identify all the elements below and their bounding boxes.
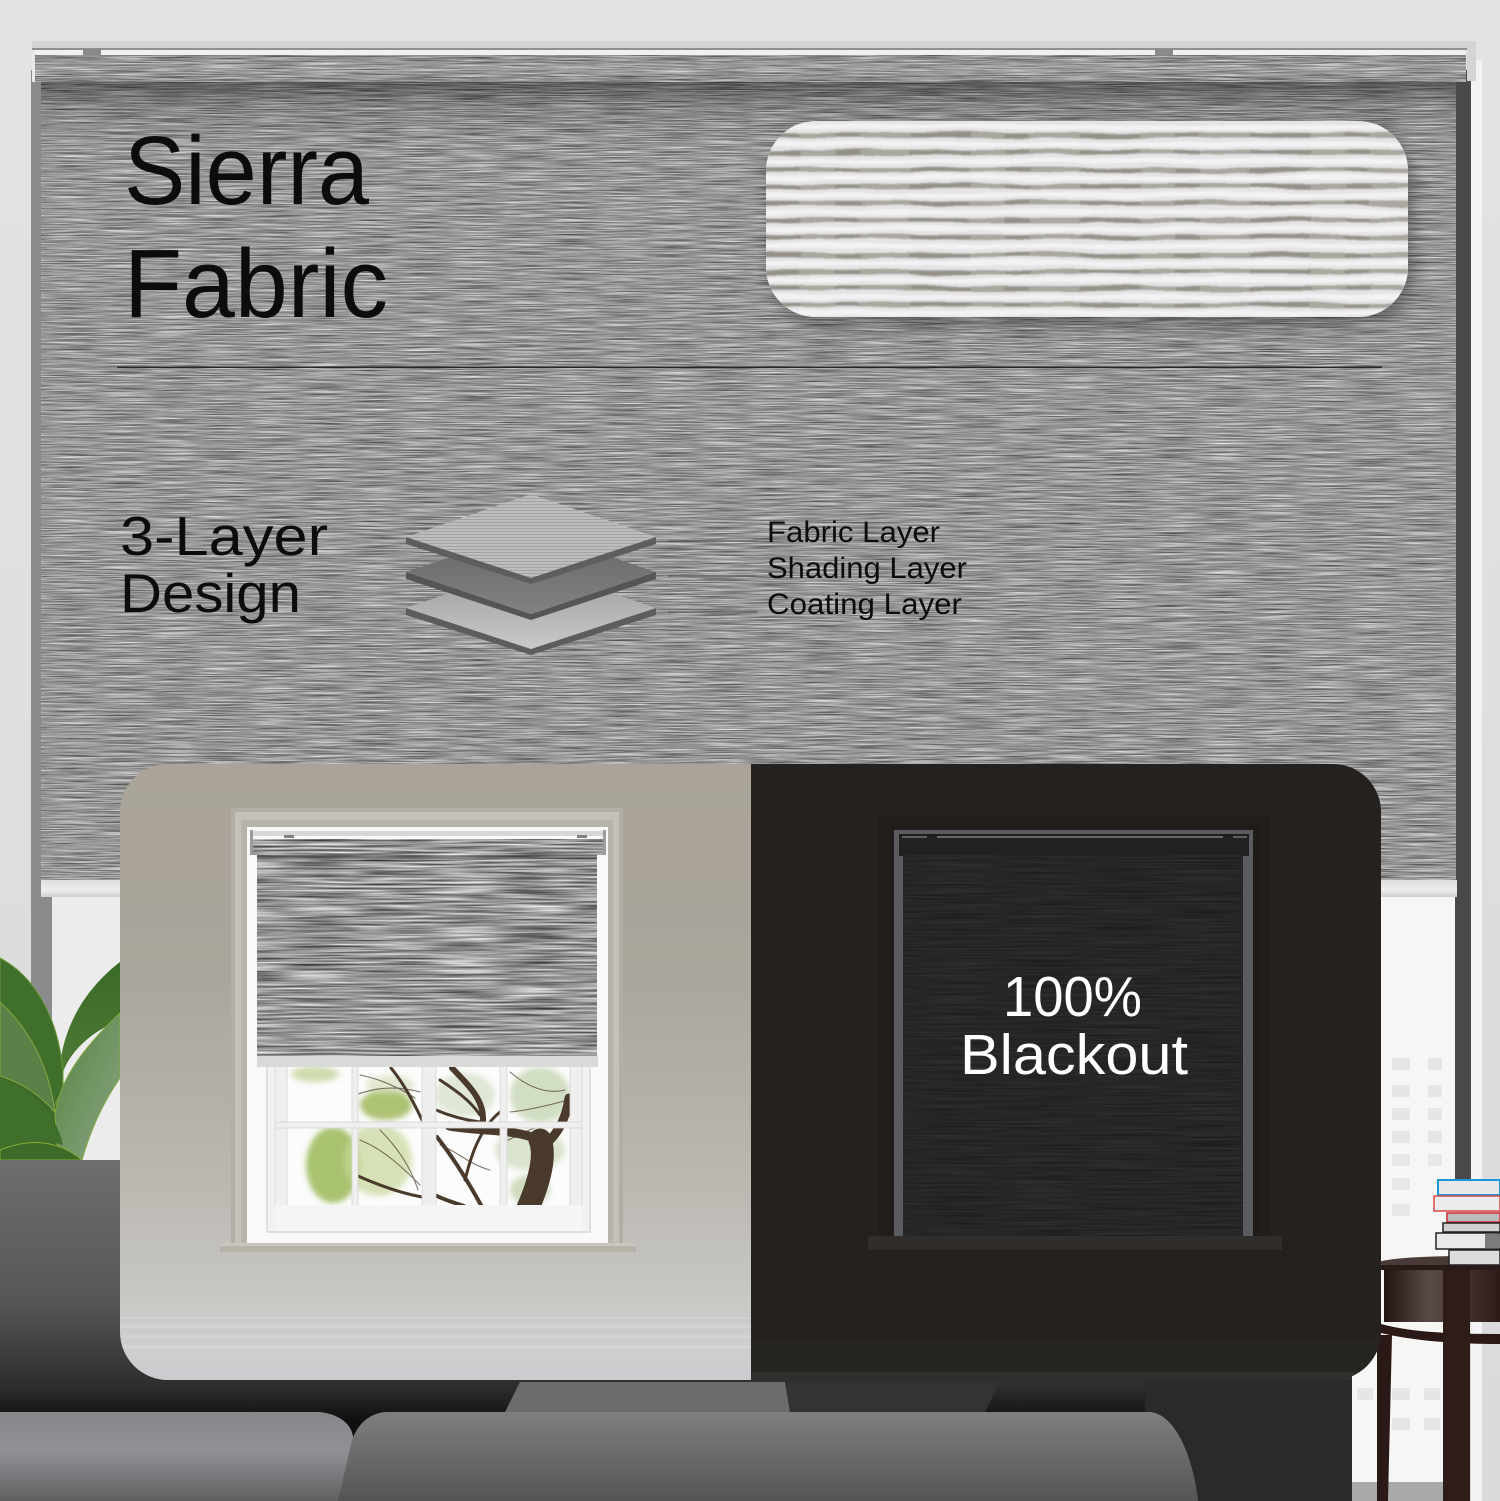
left leg bbox=[1377, 1335, 1392, 1501]
heading: 3-Layer Design bbox=[120, 505, 328, 624]
apron bbox=[1384, 1270, 1500, 1322]
layer labels: Shading Layer bbox=[767, 552, 967, 585]
fabric layer bbox=[406, 494, 656, 584]
panel: dark side bbox=[751, 764, 1381, 1380]
title: Fabric bbox=[124, 229, 388, 338]
right white strip bbox=[1471, 60, 1482, 1501]
title bbox=[124, 116, 388, 338]
window sill bbox=[220, 1243, 636, 1252]
dark window trim bbox=[878, 815, 1270, 1245]
layer labels bbox=[767, 516, 967, 621]
blackout label: 100% bbox=[1003, 965, 1142, 1029]
dark shade fabric bbox=[899, 836, 1249, 1236]
dark sill bbox=[868, 1236, 1282, 1250]
comparison panel bbox=[120, 764, 1381, 1380]
side table bbox=[1377, 1256, 1500, 1501]
fabric swatch bbox=[740, 121, 1430, 317]
front leg bbox=[1443, 1270, 1470, 1501]
lower ring bbox=[1381, 1324, 1500, 1344]
dark cassette bbox=[899, 837, 1249, 855]
tree view through panes bbox=[280, 1066, 576, 1208]
dark window side strips bbox=[894, 830, 1253, 1236]
panel: light side bbox=[120, 764, 751, 1380]
pillow bbox=[505, 1382, 790, 1412]
left seat cushion bbox=[0, 1412, 353, 1501]
right clip bbox=[1155, 49, 1173, 55]
blackout label: Blackout bbox=[960, 1023, 1188, 1087]
right seat cushion bbox=[338, 1412, 1198, 1501]
left clip bbox=[83, 49, 101, 55]
heading: 3-Layer Design: Design bbox=[120, 562, 301, 624]
window opening bbox=[247, 827, 608, 1243]
sofa bbox=[0, 1160, 1352, 1501]
fabric roll bbox=[35, 55, 1466, 82]
window sash bbox=[267, 1060, 590, 1232]
bottom bar bbox=[41, 880, 1457, 897]
baseboard bbox=[120, 1317, 751, 1348]
window frame sides bbox=[31, 70, 1471, 1185]
window trim bbox=[231, 808, 623, 1244]
coating layer bbox=[406, 565, 656, 655]
window view lower right with faint buildings bbox=[1350, 895, 1456, 1501]
title: Sierra bbox=[124, 116, 369, 225]
main fabric shade bbox=[35, 55, 1466, 897]
window view lower left bbox=[52, 895, 132, 1165]
sofa back bbox=[0, 1160, 1352, 1420]
plant bbox=[0, 958, 120, 1160]
headrail bbox=[32, 41, 1476, 82]
books bbox=[1434, 1180, 1500, 1265]
shading layer bbox=[406, 530, 656, 620]
blackout label bbox=[964, 976, 1188, 1074]
mini shade bbox=[250, 830, 606, 1067]
layers diagram bbox=[406, 494, 656, 655]
table top bbox=[1378, 1256, 1500, 1270]
divider bbox=[117, 366, 1382, 368]
leader lines bbox=[668, 541, 757, 612]
window mullions bbox=[275, 1065, 582, 1207]
layer labels: Coating Layer bbox=[767, 588, 962, 621]
heading: 3-Layer Design: 3-Layer bbox=[120, 505, 328, 567]
layer labels: Fabric Layer bbox=[767, 516, 940, 549]
